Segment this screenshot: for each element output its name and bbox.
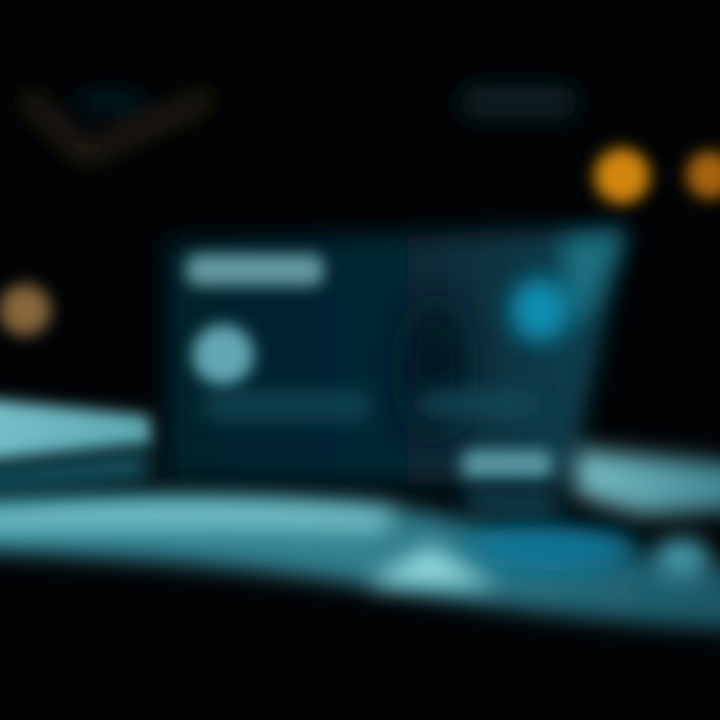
blue highlight	[510, 278, 570, 342]
top dim pill	[460, 86, 578, 118]
bottom light band	[0, 496, 720, 632]
tan dot left	[0, 284, 51, 336]
glass stem	[465, 485, 560, 520]
small pill	[462, 450, 552, 480]
dark figure	[403, 300, 467, 440]
chevron emblem	[30, 100, 205, 155]
text rows	[205, 393, 535, 417]
band highlight	[0, 501, 400, 532]
heading pill	[186, 254, 324, 286]
blue bowl	[466, 526, 638, 570]
central panel	[165, 228, 625, 485]
light triangle	[365, 545, 498, 587]
orange dot right	[686, 151, 720, 199]
right light slab	[575, 448, 720, 516]
orange dot	[594, 148, 650, 204]
right glow	[654, 538, 710, 578]
right light wedge	[560, 232, 625, 325]
left slab shadow	[0, 450, 150, 496]
circle badge	[192, 324, 254, 386]
left light slab	[0, 394, 152, 468]
